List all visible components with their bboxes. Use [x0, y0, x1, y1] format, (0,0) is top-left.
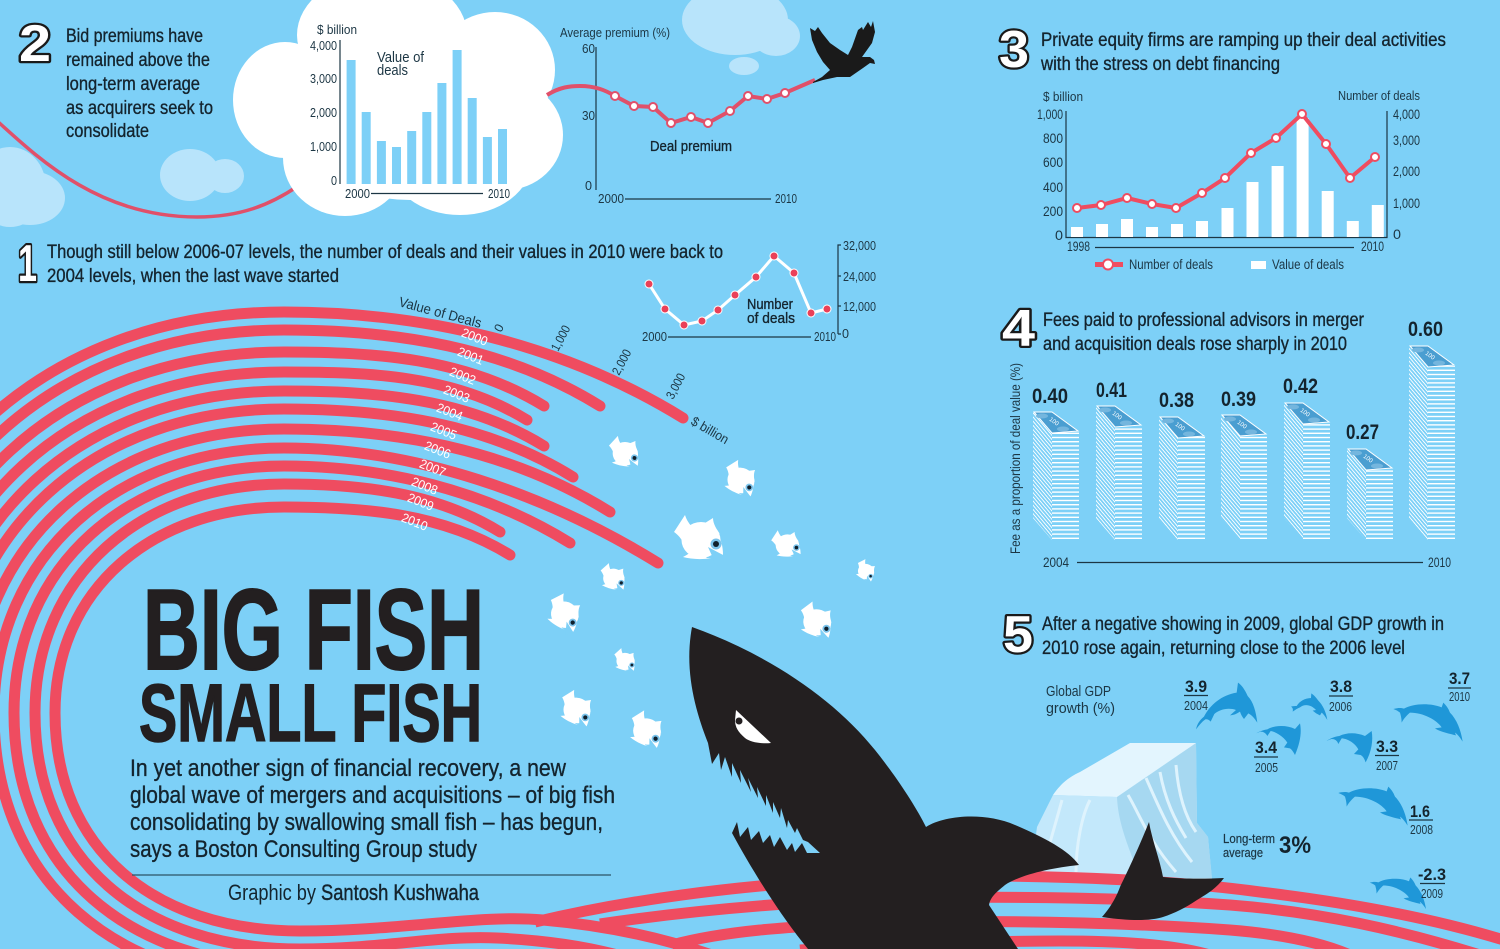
stack 0.41 [1096, 379, 1142, 540]
wave year labels: 2001 [455, 344, 486, 368]
chart: average deal premium line: 0 [585, 179, 592, 193]
stack 0.42: 0.42 [1283, 375, 1318, 398]
chart: value of deals bars: Value of [377, 49, 425, 66]
chart: number of deals line: 24,000 [843, 270, 876, 284]
dolphin value 2008: 2008 [1410, 823, 1433, 837]
chart: average deal premium line: 30 [582, 109, 595, 123]
chart: number of deals line: 2000 [642, 330, 667, 344]
stack 0.38 [1159, 389, 1205, 540]
intro text: says a Boston Consulting Group study [130, 836, 477, 863]
chart: private equity deals: Number of deals [1338, 89, 1420, 103]
stack 0.41: 0.41 [1096, 379, 1127, 402]
chart: number of deals line: 0 [842, 327, 849, 341]
title [139, 567, 484, 759]
wave axis labels: 2,000 [609, 347, 634, 377]
chart: value of deals bars: 2,000 [310, 106, 337, 120]
credit [132, 875, 611, 905]
dolphin: 2009 diving [1370, 877, 1426, 909]
dolphin value 2004: 3.9 [1185, 677, 1207, 696]
panel 5 heading: After a negative showing in 2009, global GDP growth in [1042, 614, 1444, 635]
chart: number of deals line [642, 239, 876, 344]
chart: average deal premium line [547, 26, 815, 206]
chart: private equity deals: 4,000 [1393, 106, 1420, 122]
dolphin value 2006: 3.8 [1330, 677, 1352, 696]
chart: value of deals bars: 1,000 [310, 140, 337, 154]
chart: value of deals bars: 2000 [345, 187, 370, 201]
chart label: global GDP growth: Global GDP [1046, 684, 1111, 700]
panel 4 heading [1002, 300, 1365, 358]
stack 2004 0.40 [1032, 385, 1079, 540]
chart label: global GDP growth [1046, 684, 1115, 717]
dolphin value 2010 [1393, 669, 1471, 742]
panel 4 heading: Fees paid to professional advisors in merger [1043, 310, 1365, 331]
chart: fee stacks of banknotes: Fee as a proportion of deal value (%) [1008, 363, 1023, 554]
stack 0.39 [1221, 388, 1267, 540]
value 2009: -2.3 [1418, 865, 1446, 884]
wave year labels: 2009 [405, 490, 436, 514]
intro text: In yet another sign of financial recovery, a new [130, 755, 567, 782]
chart: private equity deals: 800 [1043, 130, 1063, 146]
value 2009: 2009 [1421, 887, 1443, 901]
dolphin value 2006 [1291, 677, 1353, 720]
chart: private equity deals [1037, 89, 1420, 272]
callout: long-term average: 3% [1279, 832, 1311, 859]
stack 0.42: 100 [1299, 408, 1311, 419]
wave year labels: 2007 [417, 456, 448, 480]
chart: private equity deals: 3,000 [1393, 132, 1420, 148]
stack 0.27 [1346, 421, 1393, 540]
chart: value of deals bars [310, 23, 510, 201]
shark eye [735, 710, 771, 743]
wave 2002 [0, 352, 544, 713]
stack 2010 0.60: 0.60 [1408, 318, 1443, 341]
dolphin value 2010: 2010 [1449, 690, 1470, 704]
wave 2009 [35, 484, 635, 949]
panel 2 heading: long-term average [66, 74, 200, 95]
chart: private equity deals: 1998 [1067, 238, 1090, 254]
legend: Value of deals [1272, 257, 1344, 272]
chart: fee stacks of banknotes [1008, 318, 1455, 570]
chart: value of deals bars: 3,000 [310, 72, 337, 86]
panel 3 heading: 3 [999, 21, 1029, 79]
panel 4 heading: and acquisition deals rose sharply in 2010 [1043, 334, 1347, 355]
dolphin value 2005: 3.4 [1255, 738, 1277, 757]
chart: value of deals bars: $ billion [317, 23, 357, 37]
pale background clouds [0, 0, 800, 227]
wave 2003 [0, 372, 527, 713]
wave axis labels: 1,000 [548, 323, 573, 353]
stack 0.27: 0.27 [1346, 421, 1379, 444]
icon: black bird [810, 21, 875, 83]
panel 2 heading: 2 [19, 15, 51, 73]
panel 5 heading [1003, 606, 1444, 664]
wave year labels: 2010 [399, 510, 430, 534]
wave 2010 [55, 507, 720, 949]
intro text: consolidating by swallowing small fish – has begun, [130, 809, 603, 836]
chart: fee stacks of banknotes: 2004 [1043, 554, 1069, 570]
wave axis labels: 3,000 [663, 371, 688, 401]
stack 2004 0.40: 0.40 [1032, 385, 1068, 408]
dolphin value 2010: 3.7 [1449, 669, 1470, 688]
stack 0.39: 0.39 [1221, 388, 1256, 411]
title: SMALL FISH [139, 668, 482, 759]
panel 2 heading: consolidate [66, 121, 149, 142]
chart: private equity deals: 600 [1043, 154, 1063, 170]
chart: value of deals bars: deals [377, 62, 408, 79]
wave year labels: 2002 [447, 364, 478, 388]
wave 2001 [0, 330, 600, 713]
panel 1 heading [18, 235, 723, 293]
stack 0.41: 100 [1111, 411, 1123, 422]
chart: private equity deals: $ billion [1043, 90, 1083, 104]
panel 3 heading: Private equity firms are ramping up their deal activities [1041, 30, 1446, 51]
intro text [130, 755, 615, 863]
wave year labels: 2000 [459, 325, 490, 349]
wave 2008 [14, 466, 570, 949]
panel 2 heading: Bid premiums have [66, 26, 203, 47]
wave axis labels: Value of Deals [397, 293, 483, 331]
panel 1 heading: 1 [18, 235, 37, 293]
panel 5 heading: 2010 rose again, returning close to the 2006 level [1042, 638, 1405, 659]
dolphin value 2007: 2007 [1376, 759, 1398, 773]
credit: Santosh Kushwaha [321, 880, 480, 905]
wave 2007 [0, 448, 658, 949]
chart: value of deals bars: 2010 [488, 187, 510, 201]
value 2009 [1418, 865, 1446, 901]
panel 2: big white cloud [233, 0, 563, 216]
legend: Number of deals [1129, 257, 1213, 272]
wave year labels: 2008 [409, 474, 440, 498]
wave 2006 [0, 429, 610, 730]
chart: average deal premium line: 60 [582, 42, 595, 56]
iceberg [1030, 743, 1212, 880]
panel 2 heading [19, 15, 213, 142]
dolphin value 2004 [1184, 677, 1257, 729]
stack 0.38: 100 [1174, 422, 1186, 433]
stack 0.42 [1283, 375, 1330, 540]
panel 1 heading: Though still below 2006-07 levels, the number of deals and their values in 2010 were back to [47, 242, 723, 263]
panel 3 heading: with the stress on debt financing [1040, 54, 1280, 75]
panel 3 heading [999, 21, 1446, 79]
title: BIG FISH [143, 567, 484, 694]
panel 2 heading: remained above the [66, 50, 210, 71]
chart: average deal premium line: Deal premium [650, 138, 732, 155]
credit: Graphic by [228, 880, 316, 905]
stack 0.27: 100 [1362, 454, 1374, 465]
chart: average deal premium line: 2000 [598, 192, 624, 206]
small white fish school [539, 435, 880, 754]
panel 2 heading: as acquirers seek to [66, 98, 213, 119]
chart: private equity deals: 400 [1043, 179, 1063, 195]
chart: private equity deals: 1,000 [1037, 106, 1063, 122]
wave chart: value of deals 2000-2010 [0, 293, 732, 949]
chart label: global GDP growth: growth (%) [1046, 701, 1115, 717]
chart: value of deals bars: 0 [331, 174, 337, 188]
stack 0.39: 100 [1236, 420, 1248, 431]
chart: number of deals line: Number [747, 296, 793, 313]
callout: long-term average: average [1223, 845, 1263, 860]
dolphin value 2007 [1327, 731, 1399, 773]
wave year labels: 2005 [428, 419, 459, 443]
chart: private equity deals: 2,000 [1393, 163, 1420, 179]
chart: private equity deals: 200 [1043, 203, 1063, 219]
wave year labels: 2003 [441, 382, 472, 406]
chart: fee stacks of banknotes: 2010 [1428, 554, 1451, 570]
panel 1 heading: 2004 levels, when the last wave started [47, 266, 339, 287]
wave axis labels: 0 [491, 322, 507, 334]
callout: long-term average: Long-term [1223, 831, 1275, 846]
dolphin value 2004: 2004 [1184, 699, 1208, 713]
chart: number of deals line: of deals [747, 310, 795, 327]
dolphin value 2008: 1.6 [1410, 802, 1430, 821]
chart: number of deals line: 2010 [814, 330, 836, 344]
legend [1095, 257, 1344, 272]
icon: shark tail fin [1102, 822, 1224, 920]
chart: private equity deals: 0 [1055, 227, 1063, 243]
stack 0.38: 0.38 [1159, 389, 1194, 412]
wave axis labels [397, 293, 732, 447]
wave 2005 [0, 409, 573, 713]
panel 5 heading: 5 [1003, 606, 1033, 664]
stack 2010 0.60 [1408, 318, 1455, 540]
wave year labels: 2004 [434, 400, 465, 424]
panel 4 heading: 4 [1002, 300, 1035, 358]
wave axis labels: $ billion [688, 414, 732, 447]
wave year labels: 2006 [422, 438, 453, 462]
wave ribbons under shark [535, 876, 1500, 949]
dolphin value 2005 [1254, 723, 1301, 775]
chart: value of deals bars: 4,000 [310, 39, 337, 53]
chart: number of deals line: 32,000 [843, 239, 876, 253]
deal premium ribbon left of cloud [0, 119, 298, 217]
dolphin value 2007: 3.3 [1376, 737, 1398, 756]
chart: private equity deals: 2010 [1361, 238, 1384, 254]
wave 2000 [0, 312, 683, 713]
dolphin value 2006: 2006 [1329, 700, 1352, 714]
wave 2004 [0, 391, 544, 713]
dolphin value 2008 [1338, 787, 1433, 837]
intro text: global wave of mergers and acquisitions – of big fish [130, 782, 615, 809]
stack 2010 0.60: 100 [1424, 351, 1436, 362]
stack 2004 0.40: 100 [1048, 417, 1060, 428]
chart: private equity deals: 0 [1393, 226, 1401, 242]
chart: private equity deals: 1,000 [1393, 195, 1420, 211]
chart: number of deals line: 12,000 [843, 300, 876, 314]
wave year labels [399, 325, 490, 534]
dolphin value 2005: 2005 [1255, 761, 1278, 775]
icon: shark [689, 627, 1079, 949]
chart: average deal premium line: Average premium (%) [560, 26, 670, 40]
callout: long-term average [1223, 831, 1311, 860]
chart: average deal premium line: 2010 [775, 192, 797, 206]
